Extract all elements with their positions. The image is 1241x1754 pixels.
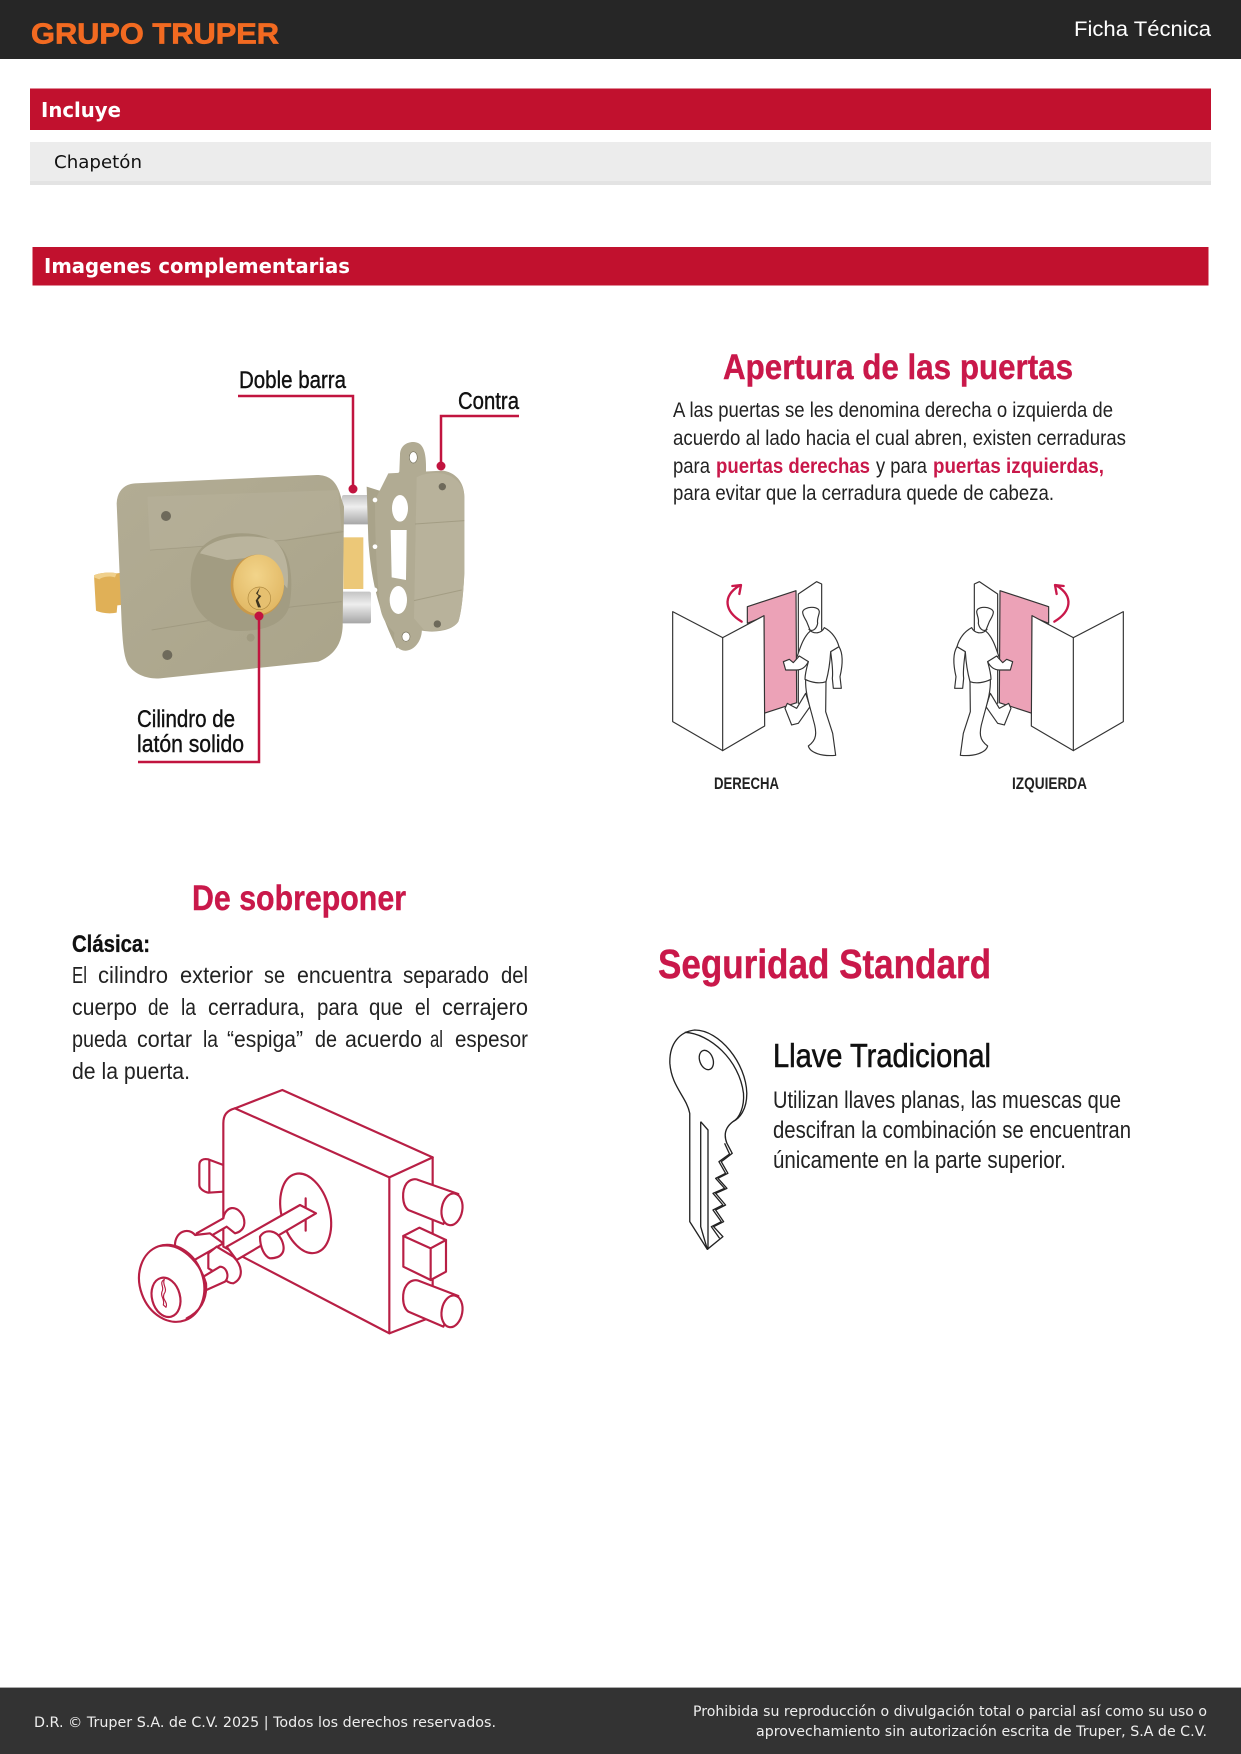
paragraph: door opening description: y para — [876, 455, 927, 478]
paragraph: key description: descifran la combinación se encuentran — [773, 1117, 1131, 1144]
paragraph: cylinder description: del — [501, 962, 528, 988]
illustration: right-hand door — [673, 582, 842, 756]
strike box face — [414, 473, 464, 631]
callout: Cilindro de latón solido — [137, 612, 264, 762]
paragraph: cylinder description: El — [72, 962, 87, 988]
paragraph: cylinder description: de la puerta. — [72, 1058, 190, 1084]
paragraph: cylinder description: la — [203, 1026, 218, 1052]
paragraph: door opening description: acuerdo al lado hacia el cual abren, existen cerraduras — [673, 427, 1126, 450]
paragraph: door opening description: puertas izquierdas, — [933, 455, 1104, 478]
cylinder — [231, 555, 284, 616]
panel: lock product with callouts — [94, 367, 520, 762]
main body — [117, 475, 344, 678]
callout: Doble barra — [238, 367, 358, 494]
paragraph: cylinder description: al — [430, 1026, 443, 1052]
paragraph: cylinder description: cortar — [137, 1026, 192, 1052]
callout: Cilindro de latón solido: Cilindro de — [137, 706, 235, 733]
paragraph: key description — [773, 1087, 1131, 1174]
heading: Seguridad Standard: Seguridad Standard — [658, 941, 991, 987]
footer: legal notice — [693, 1704, 1207, 1740]
callout: Contra — [436, 388, 520, 470]
paragraph: cylinder description: cerrajero — [442, 994, 528, 1020]
callout: Cilindro de latón solido: latón solido — [137, 731, 244, 758]
paragraph: cylinder description: se — [264, 962, 285, 988]
section: Incluye — [30, 88, 1211, 185]
paragraph: cylinder description: pueda — [72, 1026, 127, 1052]
paragraph: cylinder description: de — [315, 1026, 337, 1052]
paragraph: cylinder description: cuerpo — [72, 994, 137, 1020]
paragraph: cylinder description: la — [181, 994, 196, 1020]
paragraph: cylinder description: cerradura, — [208, 994, 305, 1020]
paragraph: cylinder description: espesor — [455, 1026, 528, 1052]
paragraph: cylinder description: que — [369, 994, 403, 1020]
paragraph: key description: Utilizan llaves planas, las muescas que — [773, 1087, 1121, 1114]
list row: Chapetón — [30, 142, 1211, 185]
paragraph: door opening description: puertas derechas — [716, 455, 870, 478]
strike plate back — [367, 480, 417, 648]
heading: Apertura de las puertas: Apertura de las puertas — [723, 348, 1073, 387]
paragraph: door opening description: para — [673, 455, 710, 478]
bolts — [342, 495, 372, 524]
header label: Ficha Técnica: Ficha Técnica — [1074, 18, 1211, 41]
illustration: left-hand door — [954, 582, 1123, 756]
header bar — [0, 0, 1241, 59]
paragraph: cylinder description — [72, 962, 528, 1084]
paragraph: door opening description: para evitar que la cerradura quede de cabeza. — [673, 482, 1054, 505]
latch — [94, 570, 143, 613]
subheading: Llave Tradicional: Llave Tradicional — [773, 1037, 991, 1074]
subheading: Clásica: Clásica: — [72, 931, 150, 958]
logo: Grupo Truper: GRUPO TRUPER — [31, 18, 279, 50]
paragraph: cylinder description: exterior — [180, 962, 253, 988]
footer: legal notice: Prohibida su reproducción o divulgación total o parcial así como su uso o — [693, 1704, 1207, 1720]
panel: De sobreponer — [72, 879, 528, 1333]
paragraph: cylinder description: el — [415, 994, 430, 1020]
paragraph: door opening description — [673, 399, 1126, 505]
illustration: lock line drawing — [128, 1090, 465, 1333]
panel: Apertura de las puertas — [673, 348, 1126, 793]
paragraph: cylinder description: para — [317, 994, 358, 1020]
section heading: Imagenes complementarias — [32, 247, 1208, 286]
paragraph: cylinder description: cilindro — [98, 962, 168, 988]
paragraph: cylinder description: “espiga” — [227, 1026, 303, 1052]
icon: key — [670, 1030, 747, 1249]
label: DERECHA: DERECHA — [714, 774, 779, 793]
paragraph: door opening description: A las puertas se les denomina derecha o izquierda de — [673, 399, 1113, 422]
heading: De sobreponer: De sobreponer — [192, 879, 406, 918]
footer: legal notice: aprovechamiento sin autorización escrita de Truper, S.A de C.V. — [756, 1724, 1207, 1740]
panel: Seguridad Standard — [658, 941, 1131, 1249]
footer: copyright: D.R. © Truper S.A. de C.V. 2025 | Todos los derechos reservados. — [34, 1715, 496, 1731]
callout: Doble barra: Doble barra — [239, 367, 347, 394]
callout: Contra: Contra — [458, 388, 520, 415]
section heading: Imagenes complementarias: Imagenes complementarias — [44, 254, 350, 278]
paragraph: cylinder description: encuentra — [297, 962, 392, 988]
footer — [0, 1687, 1241, 1754]
paragraph: cylinder description: acuerdo — [345, 1026, 422, 1052]
escutcheon — [191, 533, 291, 631]
product image: rim lock — [94, 442, 464, 678]
paragraph: cylinder description: de — [148, 994, 169, 1020]
heading: Incluye: Incluye — [41, 98, 121, 122]
list row: Chapetón: Chapetón — [54, 152, 142, 173]
paragraph: cylinder description: separado — [403, 962, 489, 988]
paragraph: key description: únicamente en la parte superior. — [773, 1147, 1066, 1174]
label: IZQUIERDA: IZQUIERDA — [1012, 774, 1087, 793]
